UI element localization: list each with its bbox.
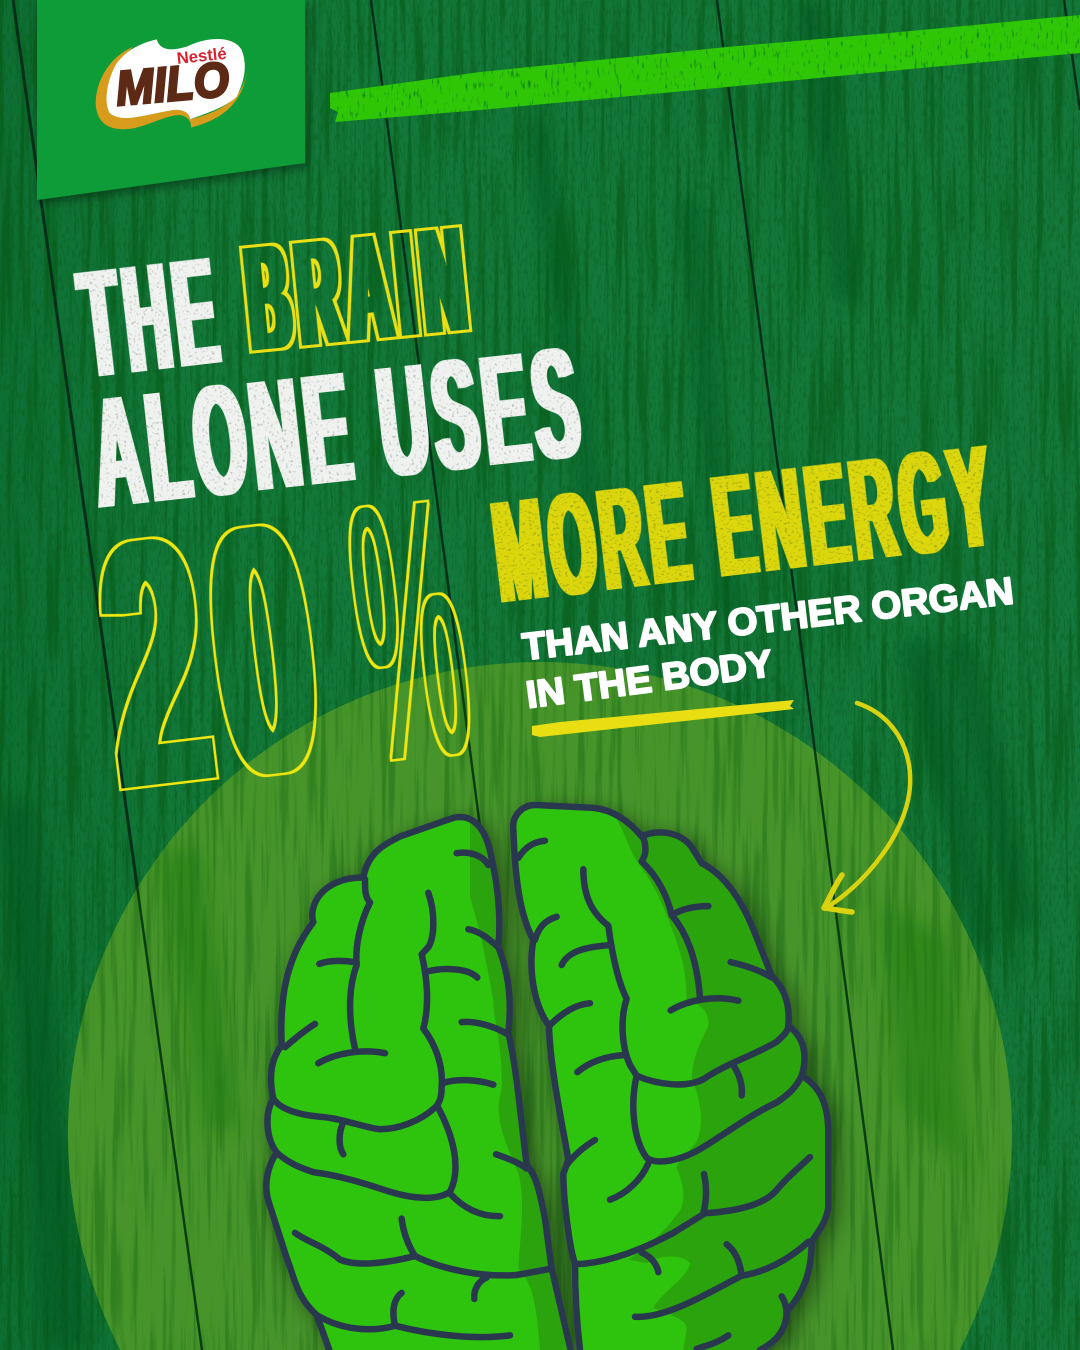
big number: 20 outlined: 20 — [85, 449, 348, 863]
logo: Nestle Milo — [96, 39, 247, 129]
yellow underline — [532, 700, 794, 737]
right hemisphere — [513, 805, 833, 1350]
background circle — [68, 662, 1012, 1350]
left hemisphere — [266, 811, 573, 1350]
text: THE — [72, 224, 231, 410]
text: BRAIN — [240, 194, 481, 382]
brain illustration — [266, 805, 833, 1350]
logo: Nestle Milo: Nestlé — [176, 44, 227, 68]
text: % — [333, 422, 486, 839]
line: in the body: IN THE BODY — [524, 643, 775, 717]
logo: Nestle Milo: MILO — [114, 53, 231, 116]
brush stroke at top — [330, 15, 1080, 122]
arrow pointing to the brain — [824, 703, 910, 912]
line: than any other organ: THAN ANY OTHER ORGAN — [520, 570, 1016, 669]
subheading — [520, 570, 1016, 717]
logo panel — [37, 0, 305, 200]
